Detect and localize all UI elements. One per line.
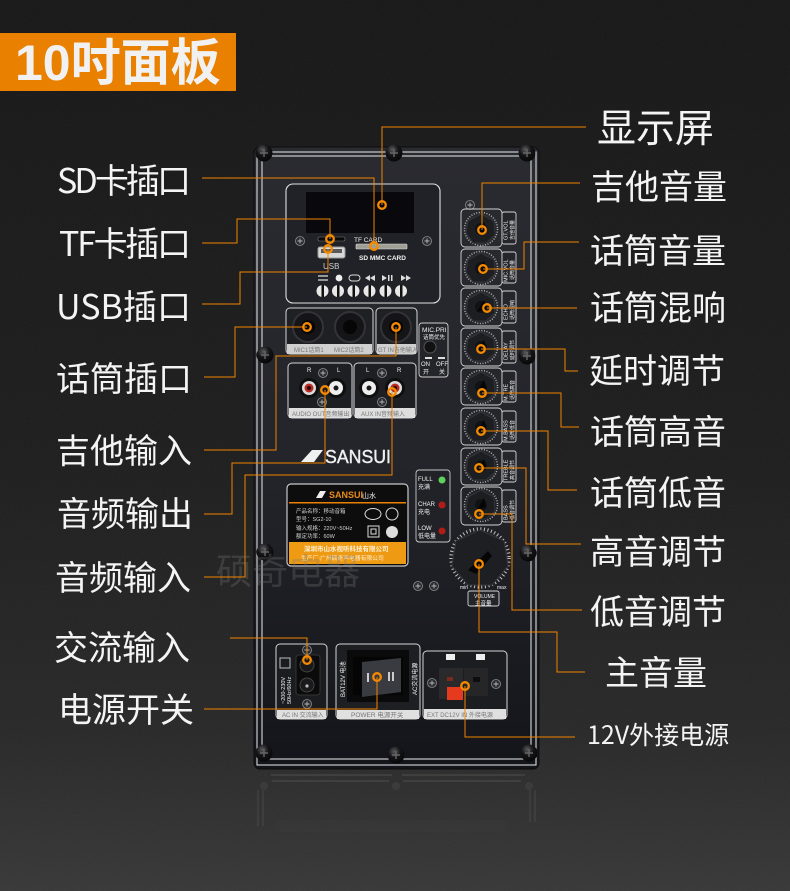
label: 高音调节: 高音调节: [590, 525, 726, 574]
display module: USB: [323, 262, 339, 271]
small control knobs: 话筒音量: [509, 260, 516, 280]
small control knobs: 话筒高音: [509, 380, 516, 400]
audio out and aux in RCA jacks: R: [397, 368, 402, 374]
AC input socket: [276, 644, 327, 719]
small control knobs: MIC.VOL: [504, 259, 510, 282]
leader: 吉他输入: [204, 323, 400, 450]
label: 话筒插口: 话筒插口: [56, 352, 192, 401]
label: 话筒混响: 话筒混响: [590, 281, 726, 330]
main volume knob: 主音量: [475, 599, 492, 607]
small control knobs: BASS: [504, 505, 510, 520]
small control knobs: 话筒低音: [509, 420, 516, 440]
small control knobs: 低音调节: [509, 500, 516, 520]
status LEDs: 充满: [418, 483, 430, 491]
product label plate: 输入规格：220V~50Hz: [296, 524, 353, 532]
small control knobs: DELAY: [504, 342, 510, 360]
label: SD卡插口: SD卡插口: [57, 154, 191, 203]
label: 吉他音量: 吉他音量: [591, 160, 727, 209]
status LEDs: [416, 470, 450, 542]
product label plate: [287, 484, 408, 566]
power switch: BAT12V 电池: [339, 661, 347, 697]
AC input socket: 50Hz/60Hz: [287, 677, 293, 704]
product label plate: 深圳市山水视听科技有限公司: [304, 544, 388, 553]
power switch: [336, 644, 420, 719]
main volume knob: max: [497, 585, 507, 591]
label: 话筒高音: 话筒高音: [590, 405, 726, 454]
product label plate: 额定功率：60W: [296, 532, 336, 540]
leader: 话筒混响: [483, 304, 577, 312]
label: 音频输出: 音频输出: [57, 487, 193, 536]
leader: SD卡插口: [202, 178, 378, 250]
mic priority switch: 话筒优先: [423, 333, 446, 341]
label: 音频输入: 音频输入: [55, 551, 191, 600]
label: TF卡插口: TF卡插口: [59, 217, 191, 266]
status LEDs: LOW: [418, 526, 432, 532]
audio out and aux in RCA jacks: [288, 363, 416, 418]
product label plate: 生产厂:广州硕奇声电器有限公司: [301, 554, 384, 562]
label: 12V外接电源: 12V外接电源: [587, 716, 729, 752]
label: 吉他输入: 吉他输入: [56, 424, 192, 473]
AC input socket: AC IN 交流输入: [282, 711, 324, 719]
leader: 低音调节: [475, 510, 582, 610]
label: USB插口: USB插口: [56, 280, 191, 329]
small control knobs: M.TRE: [504, 384, 510, 401]
display module: [286, 184, 440, 303]
mic priority switch: [419, 323, 448, 377]
title banner: 10吋面板: [15, 35, 221, 91]
leader: 交流输入: [230, 638, 311, 664]
small control knobs: 延时调节: [509, 340, 516, 360]
status LEDs: FULL: [418, 477, 433, 483]
label: 交流输入: 交流输入: [54, 621, 190, 670]
leader: 音频输出: [204, 386, 329, 514]
small control knobs: ECHO: [504, 303, 510, 320]
label: 显示屏: 显示屏: [597, 98, 714, 154]
mic priority switch: 关: [439, 368, 445, 376]
SANSUI logo: SANSUI: [325, 447, 391, 467]
microphone and guitar jacks: MIC1话筒1: [294, 346, 324, 354]
status LEDs: 充电: [418, 508, 430, 516]
small control knobs: 话筒混响: [509, 300, 516, 320]
small control knobs: [461, 200, 516, 525]
leader: 高音调节: [475, 464, 581, 544]
small control knobs: GT.VOL: [504, 220, 510, 240]
status LEDs: 低电量: [418, 532, 436, 540]
microphone and guitar jacks: MIC2话筒2: [334, 346, 364, 354]
audio out and aux in RCA jacks: L: [366, 368, 370, 374]
leader: 话筒音量: [479, 242, 579, 273]
label: 电源开关: 电源开关: [58, 683, 194, 732]
display module: SD MMC CARD: [359, 255, 406, 262]
power switch: AC交流电源: [411, 663, 419, 695]
label: 主音量: 主音量: [605, 646, 707, 695]
mic priority switch: ON: [421, 362, 430, 368]
label: 延时调节: 延时调节: [589, 344, 725, 393]
external DC 12V terminal: [423, 651, 507, 719]
audio out and aux in RCA jacks: AUX IN音频输入: [361, 410, 405, 418]
small control knobs: 吉他音量: [509, 220, 516, 240]
product label plate: 山水: [362, 491, 376, 500]
leader: USB插口: [202, 245, 332, 304]
mic priority switch: 开: [423, 369, 429, 376]
watermark: 硕奇电器: [216, 551, 360, 592]
leader: 12V外接电源: [461, 682, 575, 737]
status LEDs: CHAR: [418, 502, 436, 508]
control panel: [254, 144, 539, 769]
leader: 音频输入: [204, 388, 396, 577]
display module: TF CARD: [354, 237, 382, 244]
audio out and aux in RCA jacks: AUDIO OUT音频输出: [292, 410, 349, 418]
main volume knob: VOLUME: [474, 594, 496, 600]
product label plate: 产品名称：移动音箱: [296, 507, 346, 515]
panel reflection: [258, 775, 535, 832]
small control knobs: TREBLE: [504, 459, 510, 481]
main volume knob: min: [460, 585, 468, 591]
product label plate: 型号：SG2-10: [296, 515, 331, 523]
small control knobs: M.BASS: [504, 420, 510, 441]
leader: 话筒低音: [477, 427, 577, 490]
mic priority switch: MIC.PRI: [422, 327, 447, 334]
external DC 12V terminal: EXT DC12V IN 外接电源: [427, 711, 493, 719]
leader: 主音量: [475, 560, 585, 672]
leader: 延时调节: [477, 345, 578, 371]
leader: 话筒插口: [204, 323, 311, 377]
leader: TF卡插口: [202, 219, 334, 243]
leader: 话筒高音: [478, 389, 579, 427]
label: 低音调节: 低音调节: [590, 585, 726, 634]
product label plate: SANSUI: [329, 490, 363, 500]
AC input socket: ~200-230V: [281, 677, 287, 704]
mic priority switch: OFF: [436, 362, 448, 368]
leader: 吉他音量: [478, 183, 580, 234]
label: 话筒音量: 话筒音量: [590, 224, 726, 273]
label: 话筒低音: 话筒低音: [590, 466, 726, 515]
main volume knob: [414, 529, 509, 607]
audio out and aux in RCA jacks: L: [337, 368, 341, 374]
microphone and guitar jacks: GT IN吉他输入: [378, 346, 418, 354]
leader: 显示屏: [378, 127, 586, 209]
small control knobs: 高音调节: [509, 460, 516, 480]
power switch: POWER 电源开关: [351, 710, 404, 719]
microphone and guitar jacks: [286, 308, 418, 354]
leader: 电源开关: [204, 673, 381, 709]
audio out and aux in RCA jacks: R: [307, 368, 312, 374]
